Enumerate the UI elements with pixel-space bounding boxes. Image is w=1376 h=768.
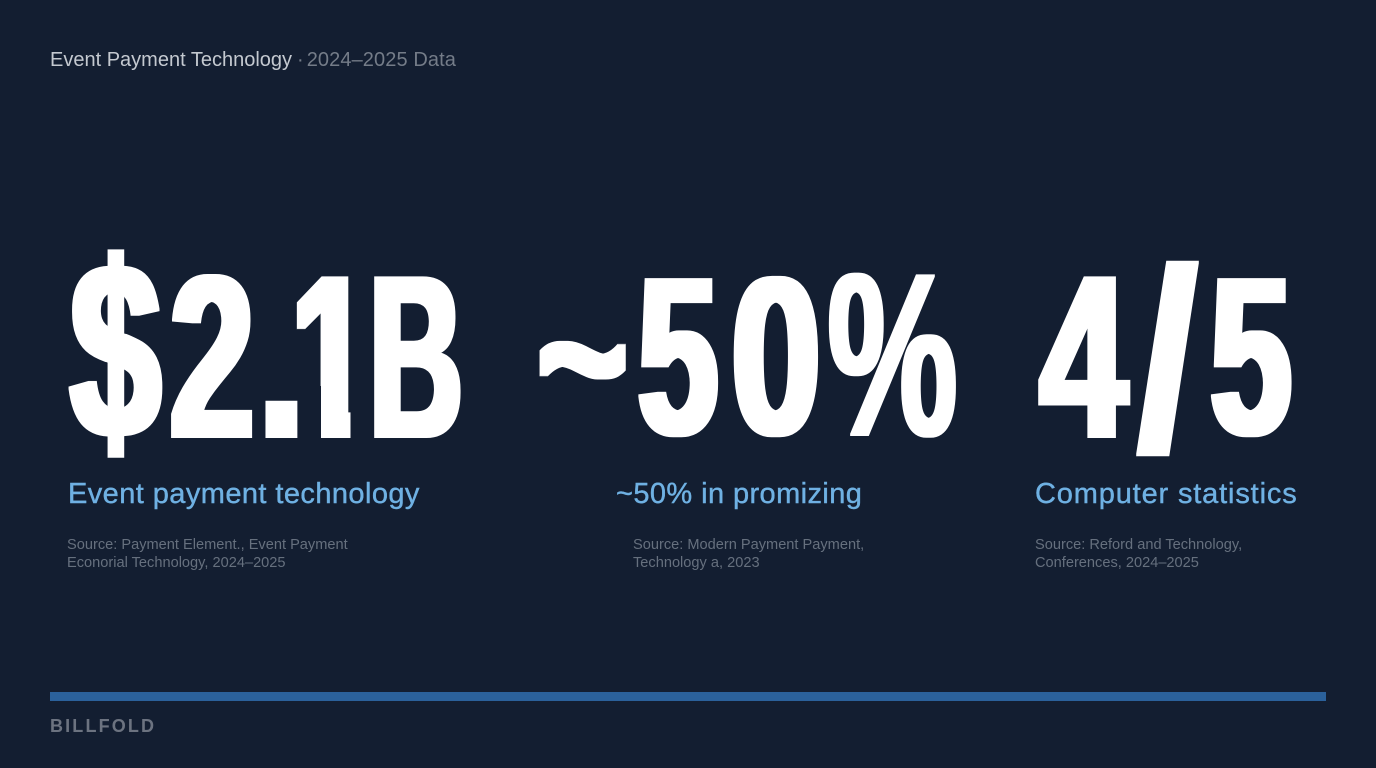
- label: event payment technology: Event payment technology: [68, 478, 420, 510]
- stat: 4/5: 5: [1210, 231, 1292, 483]
- stat: ~50%: 0: [731, 231, 821, 482]
- source: first stat: Source: Payment Element., Event Payment: [67, 537, 348, 553]
- footer brand: BILLFOLD: [50, 716, 156, 736]
- label: 50% in promizing: ~50% in promizing: [616, 478, 862, 510]
- footer rule: [50, 692, 1326, 701]
- source: second stat: Technology a, 2023: [633, 555, 760, 571]
- stat: 4/5: 4: [1040, 227, 1127, 486]
- source: second stat: Source: Modern Payment Payment,: [633, 537, 864, 553]
- source: first stat: [67, 537, 348, 571]
- stat: $2.1B: .: [258, 223, 305, 488]
- stat: $2.1B: 2: [170, 228, 254, 487]
- stat: 4/5: [1040, 216, 1292, 506]
- source: first stat: Econorial Technology, 2024–2025: [67, 555, 286, 571]
- stat: ~50%: 5: [638, 232, 718, 483]
- stat: $2.1B: $: [70, 211, 161, 493]
- big statistics: [68, 249, 1292, 458]
- stat: ~50%: %: [827, 226, 958, 485]
- source: third stat: [1035, 537, 1242, 571]
- stat: ~50%: [537, 226, 958, 486]
- source: third stat: Source: Reford and Technology,: [1035, 537, 1242, 553]
- header: report title: Event Payment Technology·2024–2025 Data: [50, 49, 456, 71]
- source: second stat: [633, 537, 864, 571]
- stat: 4/5: /: [1138, 216, 1197, 506]
- stat: $2.1B: [68, 249, 461, 458]
- stat: ~50%: ~: [537, 227, 628, 486]
- stat: $2.1B: B: [370, 227, 462, 486]
- stat: $2.1B: 1: [291, 227, 371, 486]
- label: computer statistics: Computer statistics: [1035, 478, 1298, 510]
- source: third stat: Conferences, 2024–2025: [1035, 555, 1199, 571]
